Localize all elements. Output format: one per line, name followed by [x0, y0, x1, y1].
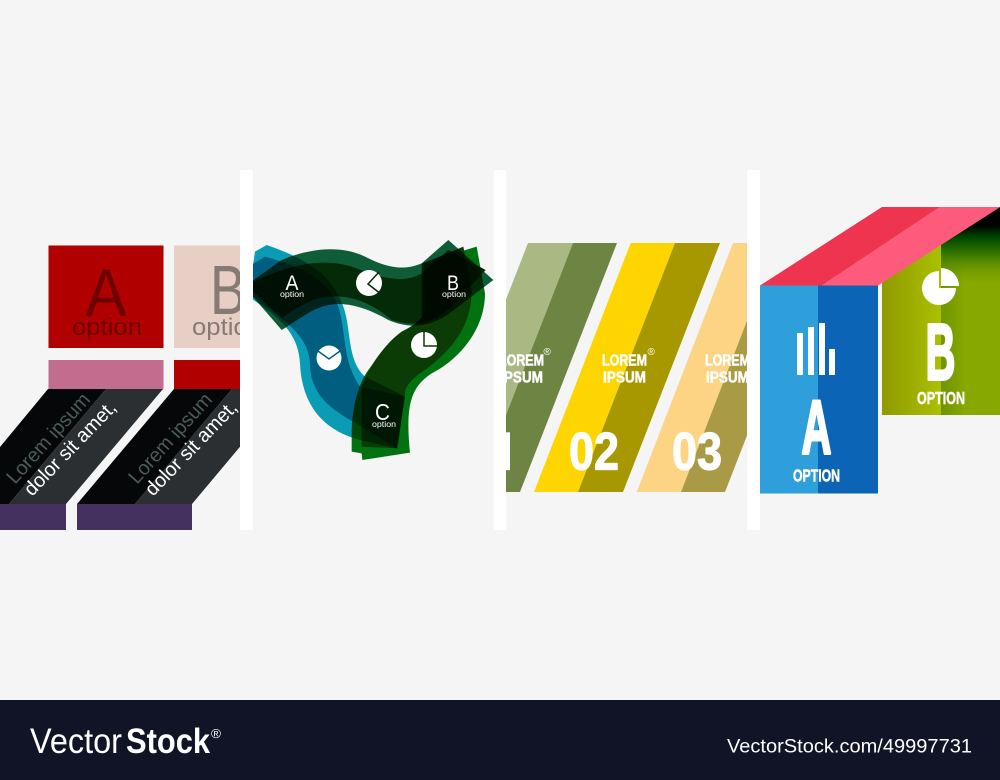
label A [280, 276, 304, 298]
icon: pie right [411, 332, 438, 358]
label C: C [375, 399, 390, 425]
image id: VectorStock.com/49997731 [727, 736, 972, 758]
arm: teal A to C [248, 245, 405, 448]
card A: A [86, 255, 127, 331]
roof [760, 207, 1000, 286]
arm: green C to B [352, 247, 485, 460]
stripe 01: IPSUM [500, 370, 543, 387]
icon: pie left [316, 346, 342, 370]
icon: pie top [356, 270, 382, 296]
stripe 02: IPSUM [603, 370, 646, 387]
ribbon B [77, 389, 244, 530]
option A wall: A [802, 386, 832, 470]
option B wall [882, 207, 1000, 415]
ribbon B: dolor sit amet, [141, 397, 242, 500]
stripe 02: ® [648, 347, 656, 358]
stripe 02: LOREM [602, 353, 647, 370]
VectorStock logo [30, 722, 221, 761]
ribbon A: dolor sit amet, [20, 397, 121, 500]
option B wall: B [926, 308, 956, 396]
option A wall [760, 286, 878, 494]
card B: B [210, 251, 246, 329]
card A [48, 246, 164, 348]
stripe 01 [506, 243, 617, 492]
stripe 03 [636, 243, 747, 492]
label B: B [447, 272, 459, 295]
stripe 01: LOREM [499, 353, 544, 370]
label B: option [442, 290, 466, 299]
stripe 03: LOREM [705, 353, 750, 370]
ribbon A [0, 389, 163, 530]
panel: option cards [0, 246, 262, 530]
option A wall: OPTION [793, 466, 840, 486]
icon: pie chart [922, 268, 959, 305]
label A: option [280, 290, 304, 299]
label C: option [372, 420, 396, 429]
card A: option [72, 314, 142, 341]
VectorStock logo: ® [211, 726, 221, 741]
stripe 01: ® [544, 347, 552, 358]
stripe 03: 03 [672, 422, 722, 482]
panel: curved three-arm diagram [248, 240, 493, 460]
VectorStock logo: Stock [126, 722, 210, 761]
stripe 03: IPSUM [706, 370, 749, 387]
panel: house-shaped options [760, 207, 1000, 494]
ribbon A: Lorem ipsum [2, 389, 95, 488]
option B wall: OPTION [917, 388, 965, 408]
colour strips [48, 360, 244, 389]
arm: dark green A to B [250, 240, 493, 330]
stripe 02 [534, 243, 720, 492]
card B: option [192, 314, 262, 341]
ribbon B: Lorem ipsum [124, 389, 217, 488]
panel: numbered diagonal stripes [506, 243, 747, 492]
stripe 02: 02 [569, 422, 619, 482]
card B [174, 246, 240, 348]
VectorStock logo: Vector [30, 722, 122, 761]
separators [240, 170, 760, 530]
label A: A [286, 272, 298, 295]
label C [372, 404, 396, 428]
icon: bar chart [797, 323, 835, 375]
footer bar [0, 700, 1000, 780]
stripe 01: 01 [468, 422, 518, 482]
label B [442, 276, 466, 298]
